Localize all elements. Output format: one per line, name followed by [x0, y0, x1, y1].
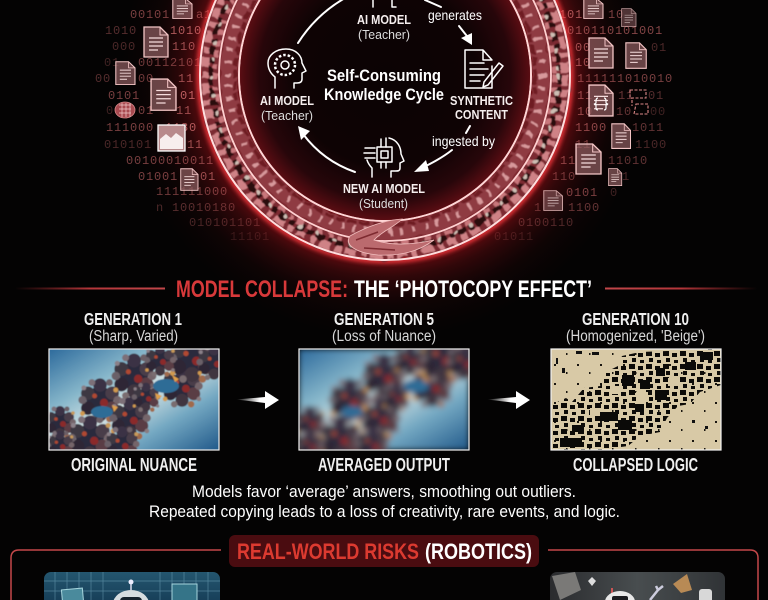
image: sharp fractal — [48, 348, 220, 451]
binary field: right — [494, 8, 673, 244]
binary field: right: 11 — [560, 154, 576, 168]
arrow: generates to synthetic content — [459, 26, 472, 45]
binary field: right: 0101 — [566, 186, 598, 200]
binary field: right: 1100 — [575, 121, 607, 135]
node: left AI model: AI MODEL — [260, 93, 314, 108]
panel: generation 10: COLLAPSED LOGIC — [573, 455, 698, 475]
panel: generation 1 — [48, 313, 220, 471]
panel: generation 1: (Sharp, Varied) — [89, 328, 178, 345]
arrow: generates stub — [425, 0, 441, 7]
ouroboros ring — [199, 0, 571, 261]
node: new AI model: NEW AI MODEL — [343, 181, 425, 196]
binary field: right: 010110101001 — [567, 24, 663, 38]
node: top AI model — [357, 0, 411, 42]
icon: document with pencil — [465, 50, 503, 88]
node: top AI model: AI MODEL — [357, 12, 411, 27]
image: robot with scattered objects — [550, 572, 725, 600]
serpent head and tail — [348, 219, 434, 255]
panel: generation 10: (Homogenized, 'Beige') — [566, 328, 705, 345]
binary field: right: 01011 — [494, 230, 534, 244]
panel: generation 10: GENERATION 10 — [582, 309, 689, 329]
binary field: left: 11 — [176, 104, 192, 118]
arrow: ingested by new model — [414, 150, 452, 172]
binary field: right: 1011 — [632, 121, 664, 135]
binary field: left: 0101 — [108, 89, 140, 103]
icon: head with neural gear — [268, 49, 306, 88]
document icons: right — [544, 0, 648, 210]
panel: generation 5: (Loss of Nuance) — [332, 328, 436, 345]
binary field: left: 01001 — [138, 170, 178, 184]
binary field: right: 00 — [575, 41, 591, 55]
binary field: left: 11101 — [230, 230, 270, 244]
binary field: left: 111000 — [106, 121, 154, 135]
binary field: left: 110 — [172, 40, 196, 54]
node: new AI model: (Student) — [359, 196, 408, 211]
binary field: left: 01 — [200, 170, 216, 184]
binary field: right: 10 — [575, 56, 591, 70]
arrow: content stub — [466, 126, 470, 133]
binary field: left: 0 — [106, 104, 114, 118]
binary field: left: 01 — [138, 104, 154, 118]
centre title: Self-Consuming — [327, 66, 441, 85]
arrow: generation 1 to 5 — [236, 391, 279, 409]
label: generates: generates — [428, 7, 482, 23]
explanation text: Repeated copying leads to a loss of creativity, rare events, and logic. — [149, 502, 620, 521]
binary field: right: 1100 — [568, 201, 600, 215]
image: collapsed beige fractal — [551, 349, 721, 450]
binary field: right: 11 — [618, 89, 634, 103]
label: ingested by: ingested by — [432, 133, 495, 149]
white rim lines — [200, 0, 570, 260]
panel: generation 5: AVERAGED OUTPUT — [318, 455, 450, 475]
cycle arrows — [298, 0, 472, 172]
binary field: right: 111111010010 — [577, 72, 673, 86]
binary field: left: 11 — [178, 72, 194, 86]
icon: top head — [373, 0, 396, 7]
binary field: right: 11 — [577, 89, 593, 103]
section heading: model collapse: THE ‘PHOTOCOPY EFFECT’ — [354, 276, 592, 303]
arrow: new model to teacher — [298, 126, 355, 172]
binary field: left: 01 — [180, 89, 196, 103]
binary field: left: 111111000 — [156, 185, 228, 199]
binary field: right: 101 — [559, 8, 583, 22]
binary field: left: 01 — [104, 56, 120, 70]
icon: head with chip — [364, 138, 404, 177]
binary field: left: 1010 — [170, 24, 202, 38]
node: synthetic content: SYNTHETIC — [450, 93, 514, 108]
arrow: generation 5 to 10 — [487, 391, 530, 409]
binary field: left: 1180 — [165, 121, 197, 135]
binary field: left: 10010180 — [172, 201, 236, 215]
outer scaled band — [205, 0, 565, 255]
node: left AI model: (Teacher) — [261, 108, 313, 123]
heading: real-world risks — [229, 535, 539, 567]
node: left AI model — [260, 49, 314, 123]
panel: generation 1: ORIGINAL NUANCE — [71, 455, 197, 475]
document icons: left — [115, 0, 198, 190]
binary field: left — [95, 8, 270, 244]
binary field: left: 010101101 — [189, 216, 261, 230]
binary field: right: 10 — [577, 105, 593, 119]
binary field: right: 01 — [648, 89, 664, 103]
image: blurred fractal — [298, 348, 470, 451]
binary field: right: 1100 — [635, 138, 667, 152]
heading: real-world risks: (ROBOTICS) — [425, 539, 532, 564]
heading: real-world risks: REAL-WORLD RISKS — [237, 539, 419, 564]
binary field: right: 0100110 — [518, 216, 574, 230]
binary field: right: 1 — [622, 170, 630, 184]
binary field: left: 00112101 — [138, 56, 202, 70]
binary field: left: 010101 — [104, 138, 152, 152]
binary field: right: 10 — [608, 8, 624, 22]
explanation text — [149, 482, 620, 521]
binary field: right: 11010 — [608, 154, 648, 168]
binary field: right: 11 — [575, 138, 591, 152]
binary field: left: 1010 — [105, 24, 137, 38]
binary field: right: 110 — [552, 170, 576, 184]
binary field: right: 0 — [610, 186, 618, 200]
red halo behind ring — [120, 0, 650, 340]
inner segmented band — [228, 0, 542, 232]
binary field: left: 11 — [187, 138, 203, 152]
panel: generation 5: GENERATION 5 — [334, 309, 434, 329]
panel: generation 10 — [551, 309, 721, 475]
section heading: model collapse — [15, 276, 757, 303]
node: new AI model — [343, 138, 425, 211]
image: robot in simulation grid — [44, 572, 220, 600]
binary field: left: n — [156, 201, 164, 215]
binary field: left: 00101 — [130, 8, 170, 22]
panel: real-world risks frame — [11, 535, 758, 600]
binary field: left: 000 — [112, 40, 136, 54]
arrow: teacher to top model — [298, 0, 345, 43]
binary field: right: 00 — [650, 105, 666, 119]
section heading: model collapse: MODEL COLLAPSE: — [176, 276, 348, 303]
centre title — [324, 66, 444, 104]
binary field: left: 00100010011 — [126, 154, 214, 168]
node: synthetic content — [450, 50, 514, 122]
binary field: left: a1 — [196, 8, 212, 22]
binary field: right: 1 — [534, 201, 542, 215]
node: top AI model: (Teacher) — [358, 27, 410, 42]
binary field: left: 00 — [138, 72, 154, 86]
node: synthetic content: CONTENT — [455, 107, 508, 122]
panel: generation 5 — [298, 313, 470, 471]
ring outer glow — [199, 0, 571, 261]
binary field: left: 00 — [95, 72, 111, 86]
binary field: right: 10 — [616, 105, 632, 119]
panel: generation 1: GENERATION 1 — [84, 309, 182, 329]
centre title: Knowledge Cycle — [324, 85, 444, 104]
binary field: right: 01 — [651, 41, 667, 55]
inner dark disc — [240, 0, 530, 220]
explanation text: Models favor ‘average’ answers, smoothing out outliers. — [192, 482, 576, 501]
